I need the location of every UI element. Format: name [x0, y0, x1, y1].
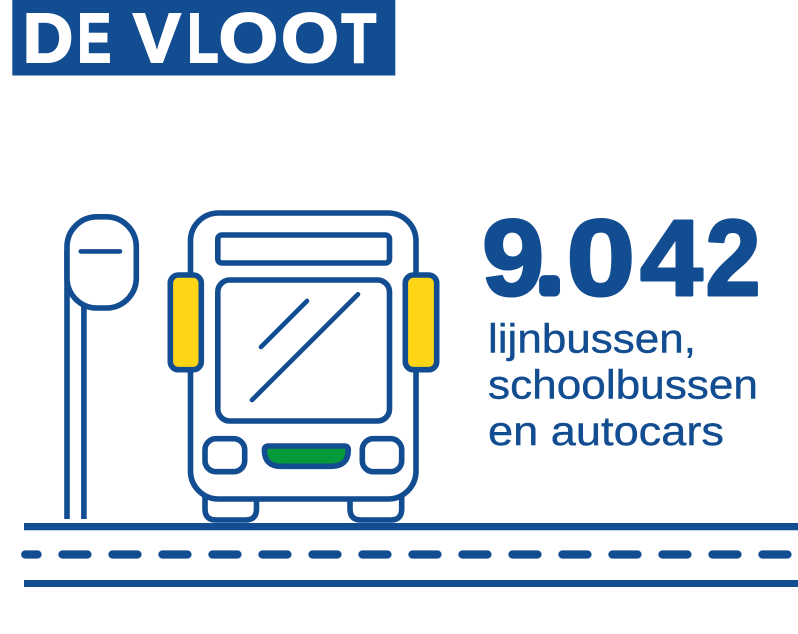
title: L [187, 0, 219, 77]
road [24, 527, 798, 584]
title: E [77, 0, 111, 77]
icon: bus [170, 213, 437, 520]
description text: lijnbussen, [488, 316, 696, 362]
title [12, 0, 395, 77]
big number: 0 [567, 197, 635, 318]
description text: en autocars [488, 408, 724, 454]
big number [482, 197, 760, 318]
description text [488, 316, 758, 454]
title: O [281, 0, 339, 77]
title: D [23, 0, 73, 77]
big number: 9 [482, 197, 544, 318]
icon: bus stop sign [67, 217, 136, 519]
description text: schoolbussen [488, 362, 758, 408]
title: V [133, 0, 181, 77]
title: T [342, 0, 376, 77]
title: O [219, 0, 278, 77]
big number: 4 [640, 197, 703, 318]
big number: . [540, 228, 559, 306]
big number: 2 [706, 197, 760, 318]
